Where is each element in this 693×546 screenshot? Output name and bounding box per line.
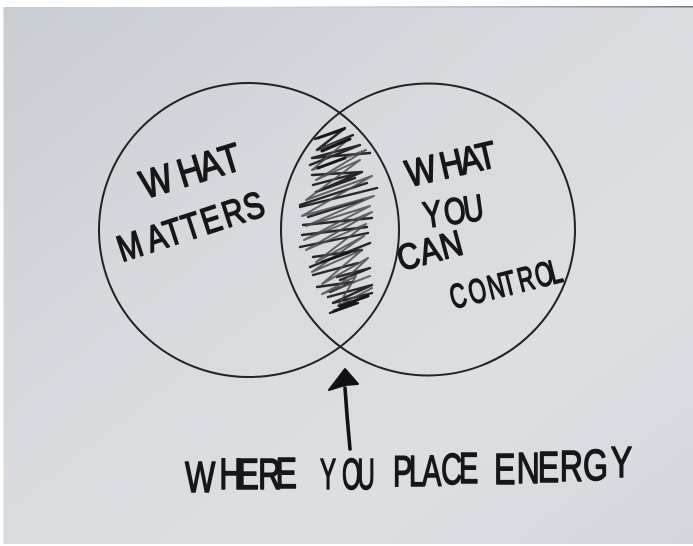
label: what matters — [112, 134, 270, 270]
word: you: YOU — [320, 449, 375, 499]
word: where: WHERE — [185, 449, 297, 502]
arrow: pointing up to overlap — [329, 369, 358, 449]
word: place: PLACE — [393, 443, 478, 495]
word: can: CAN — [393, 224, 467, 279]
scribble: shaded overlap — [300, 128, 377, 313]
word: energy: ENERGY — [494, 438, 632, 494]
label: what you can control — [393, 134, 566, 317]
circle: what matters — [99, 83, 399, 377]
circle: what you can control — [281, 84, 575, 376]
word: matters: MATTERS — [112, 184, 270, 270]
venn diagram — [99, 83, 575, 377]
word: what: WHAT — [134, 134, 246, 207]
caption: where you place energy — [185, 438, 632, 502]
word: you: YOU — [420, 186, 486, 236]
word: control: CONTROL — [446, 253, 566, 317]
arrow stem — [345, 388, 350, 449]
arrow head — [329, 369, 358, 390]
word: what: WHAT — [401, 134, 501, 195]
